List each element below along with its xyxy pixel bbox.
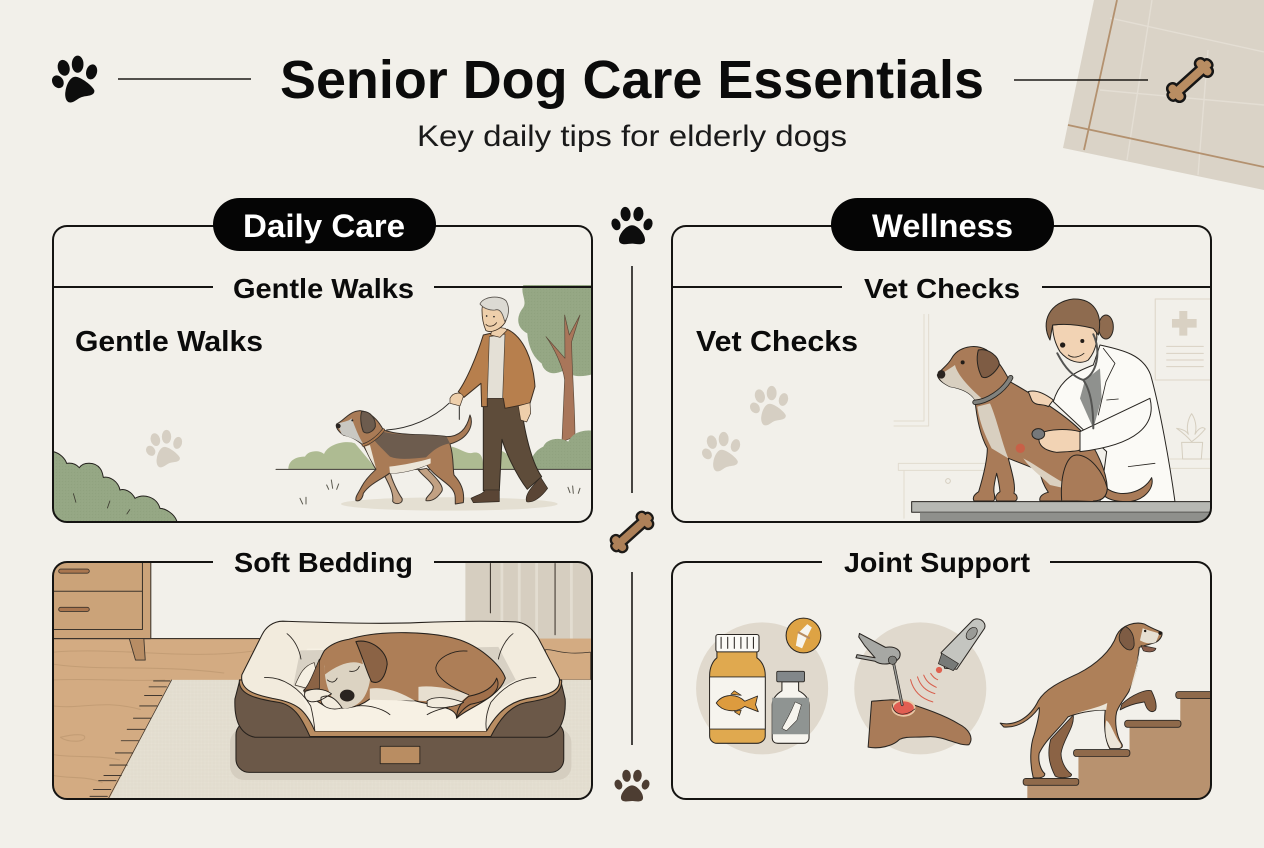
panel border	[672, 562, 1211, 799]
decorative linen swatch	[1063, 0, 1264, 190]
dog	[385, 468, 442, 504]
icon: paw center top	[610, 206, 654, 244]
title: Senior Dog Care Essentials	[280, 50, 984, 110]
dog on stairs	[1049, 715, 1073, 778]
head	[1053, 322, 1097, 362]
table	[912, 502, 1212, 512]
panel: gentle walks	[53, 226, 593, 525]
subtitle: Key daily tips for elderly dogs	[417, 120, 847, 153]
panel sublabel: Gentle Walks	[75, 326, 263, 358]
title rule left	[118, 78, 251, 80]
header	[50, 50, 1218, 153]
pill heading: daily care	[213, 198, 436, 251]
icon: faint paw print	[144, 430, 183, 467]
dog	[1103, 478, 1152, 502]
icon: paw top left	[50, 56, 99, 102]
pill heading: daily care: Daily Care	[243, 208, 405, 244]
stairs	[1027, 698, 1210, 798]
icon: faint paw print upper	[748, 386, 790, 425]
bush bottom left	[53, 452, 177, 525]
illustration: vet examining dog	[894, 299, 1213, 522]
rug	[110, 680, 591, 798]
pill heading: wellness	[831, 198, 1054, 251]
supplements	[696, 622, 828, 754]
icon: bone top right	[1162, 54, 1218, 106]
vet coat	[1053, 345, 1175, 502]
icon: paw center bottom	[613, 769, 651, 801]
header band: Joint Support	[844, 547, 1030, 578]
man	[483, 397, 542, 491]
panel sublabel: Vet Checks	[696, 326, 858, 358]
bed	[230, 729, 571, 780]
icon: bone center	[606, 507, 658, 557]
header band: Soft Bedding	[234, 547, 413, 578]
illustration group: supplements, therapy, stairs	[696, 618, 1214, 809]
therapy	[854, 622, 986, 754]
panel: vet checks	[672, 226, 1213, 522]
panel: joint support	[672, 547, 1214, 809]
arms	[1028, 391, 1053, 407]
header band: Vet Checks	[864, 273, 1020, 304]
panel border	[53, 226, 592, 522]
panel border	[53, 562, 592, 799]
center divider column	[606, 206, 658, 801]
header band covering border: Gentle Walks	[233, 273, 414, 304]
illustration: man walking dog in park	[276, 285, 593, 511]
icon: faint paw print lower	[700, 432, 742, 471]
panel: soft bedding	[50, 547, 596, 812]
sleeping dog	[304, 633, 505, 718]
illustration: dog sleeping on bed	[50, 560, 596, 812]
title rule right	[1014, 79, 1148, 81]
panel border	[672, 226, 1211, 522]
pill heading: wellness: Wellness	[872, 208, 1013, 244]
